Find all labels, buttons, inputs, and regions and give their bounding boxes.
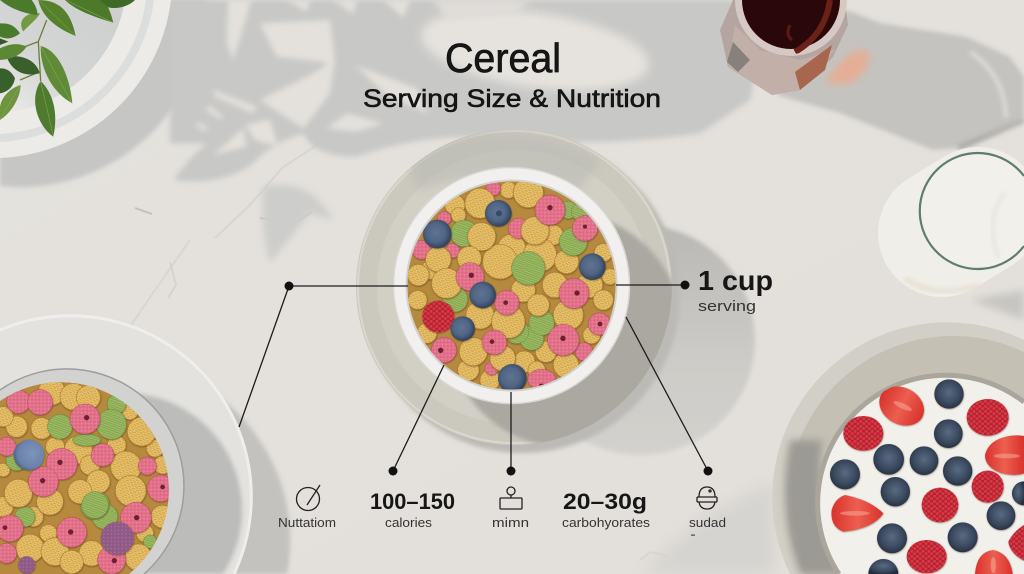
stat: 100-150 calories bbox=[370, 489, 455, 530]
tea glass top right bbox=[720, 0, 848, 95]
left plate and cereal bowl bbox=[0, 316, 251, 574]
plate with leaves top left bbox=[0, 0, 171, 158]
shadows of plate and leaves on marble bbox=[0, 0, 770, 263]
label: Nuttatiom: Nuttatiom bbox=[278, 516, 336, 530]
lower right soft shadow bbox=[640, 480, 775, 574]
stat: 20-30g carbohydrates: carbohyorates bbox=[562, 515, 651, 530]
stat: 20-30g carbohydrates: 20–30g bbox=[563, 489, 647, 514]
right bowl milk with berries bbox=[830, 379, 1024, 574]
callout: 1 cup serving: serving bbox=[698, 298, 756, 315]
callout: 1 cup serving bbox=[698, 265, 773, 315]
label: mimn: mimn bbox=[492, 515, 529, 530]
stat: 100-150 calories: calories bbox=[385, 515, 433, 530]
left plate shadow on marble bbox=[0, 360, 290, 574]
cereal and berries bbox=[408, 178, 618, 393]
callout: bowl leader lines bbox=[239, 280, 712, 476]
milk glass right bbox=[905, 153, 1024, 320]
stat: 100-150 calories: 100–150 bbox=[370, 489, 455, 514]
right plate bbox=[772, 322, 1024, 574]
label: sudad bbox=[689, 515, 726, 536]
icon: sudad bowl bbox=[697, 487, 717, 509]
center plate bbox=[356, 129, 682, 447]
icon: mimn scale bbox=[500, 487, 522, 509]
title: Cereal bbox=[445, 35, 561, 81]
subtitle: Serving Size & Nutrition bbox=[363, 85, 661, 113]
center bowl of cereal bbox=[394, 168, 630, 404]
label: sudad: sudad bbox=[689, 515, 726, 530]
shadow of center plate bbox=[364, 137, 755, 455]
left bowl cereal bbox=[0, 378, 174, 574]
callout: 1 cup serving: 1 cup bbox=[698, 265, 773, 296]
icon: plant leaves bbox=[0, 0, 135, 137]
shadow under glass on the right bbox=[777, 10, 1024, 150]
icon: nutrition circle bbox=[296, 485, 320, 510]
stat: 20-30g carbohydrates bbox=[562, 489, 651, 530]
